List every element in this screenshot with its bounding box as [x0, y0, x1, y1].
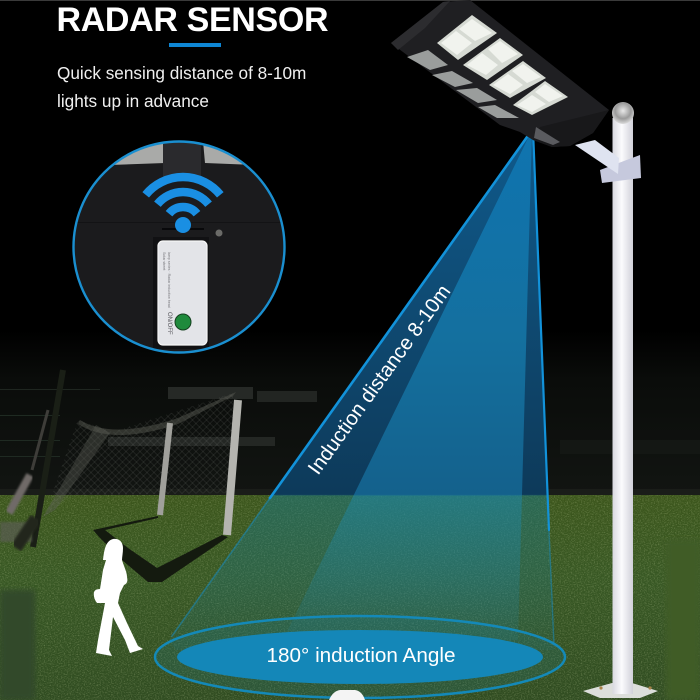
description text: lights up in advance	[57, 91, 209, 111]
pedestrian silhouette	[94, 539, 143, 656]
lamp arm and clamp	[575, 140, 641, 183]
induction distance label: Induction distance 8-10m	[303, 281, 455, 479]
bottom white marker	[329, 690, 365, 700]
sensor label plate	[158, 241, 207, 345]
soccer goal	[0, 370, 238, 548]
title underline	[169, 43, 221, 47]
lamp LED panels: side row	[407, 50, 519, 118]
inset circle: sensor close-up	[72, 140, 286, 354]
icon: wifi signal	[146, 177, 220, 233]
ellipse label: 180° induction Angle	[266, 644, 456, 667]
sensor label plate: ON/OFF	[166, 312, 172, 335]
description text: Quick sensing distance of 8-10m	[57, 63, 306, 83]
solar street lamp	[391, 0, 609, 147]
lamp LED panels: main row	[437, 15, 568, 115]
sensing cone: inner beam	[283, 130, 532, 640]
detection ring ellipse	[155, 616, 565, 698]
lamp LED modules	[441, 19, 563, 112]
background: grass field	[0, 495, 700, 700]
sensor label plate: Solar street	[162, 252, 166, 270]
lamp sensor cover	[534, 127, 560, 145]
top edge line	[0, 0, 700, 1]
detection zone ellipse	[177, 630, 543, 684]
background: night stadium stands	[0, 330, 700, 496]
goal shadow on grass	[93, 516, 228, 582]
description text	[57, 63, 306, 111]
cone edges	[172, 130, 554, 645]
title: RADAR SENSOR	[56, 1, 328, 39]
pole	[583, 102, 658, 698]
sensor label plate: lamp series · Radar induction head	[167, 252, 171, 308]
sensing cone: outer beam	[169, 130, 554, 650]
